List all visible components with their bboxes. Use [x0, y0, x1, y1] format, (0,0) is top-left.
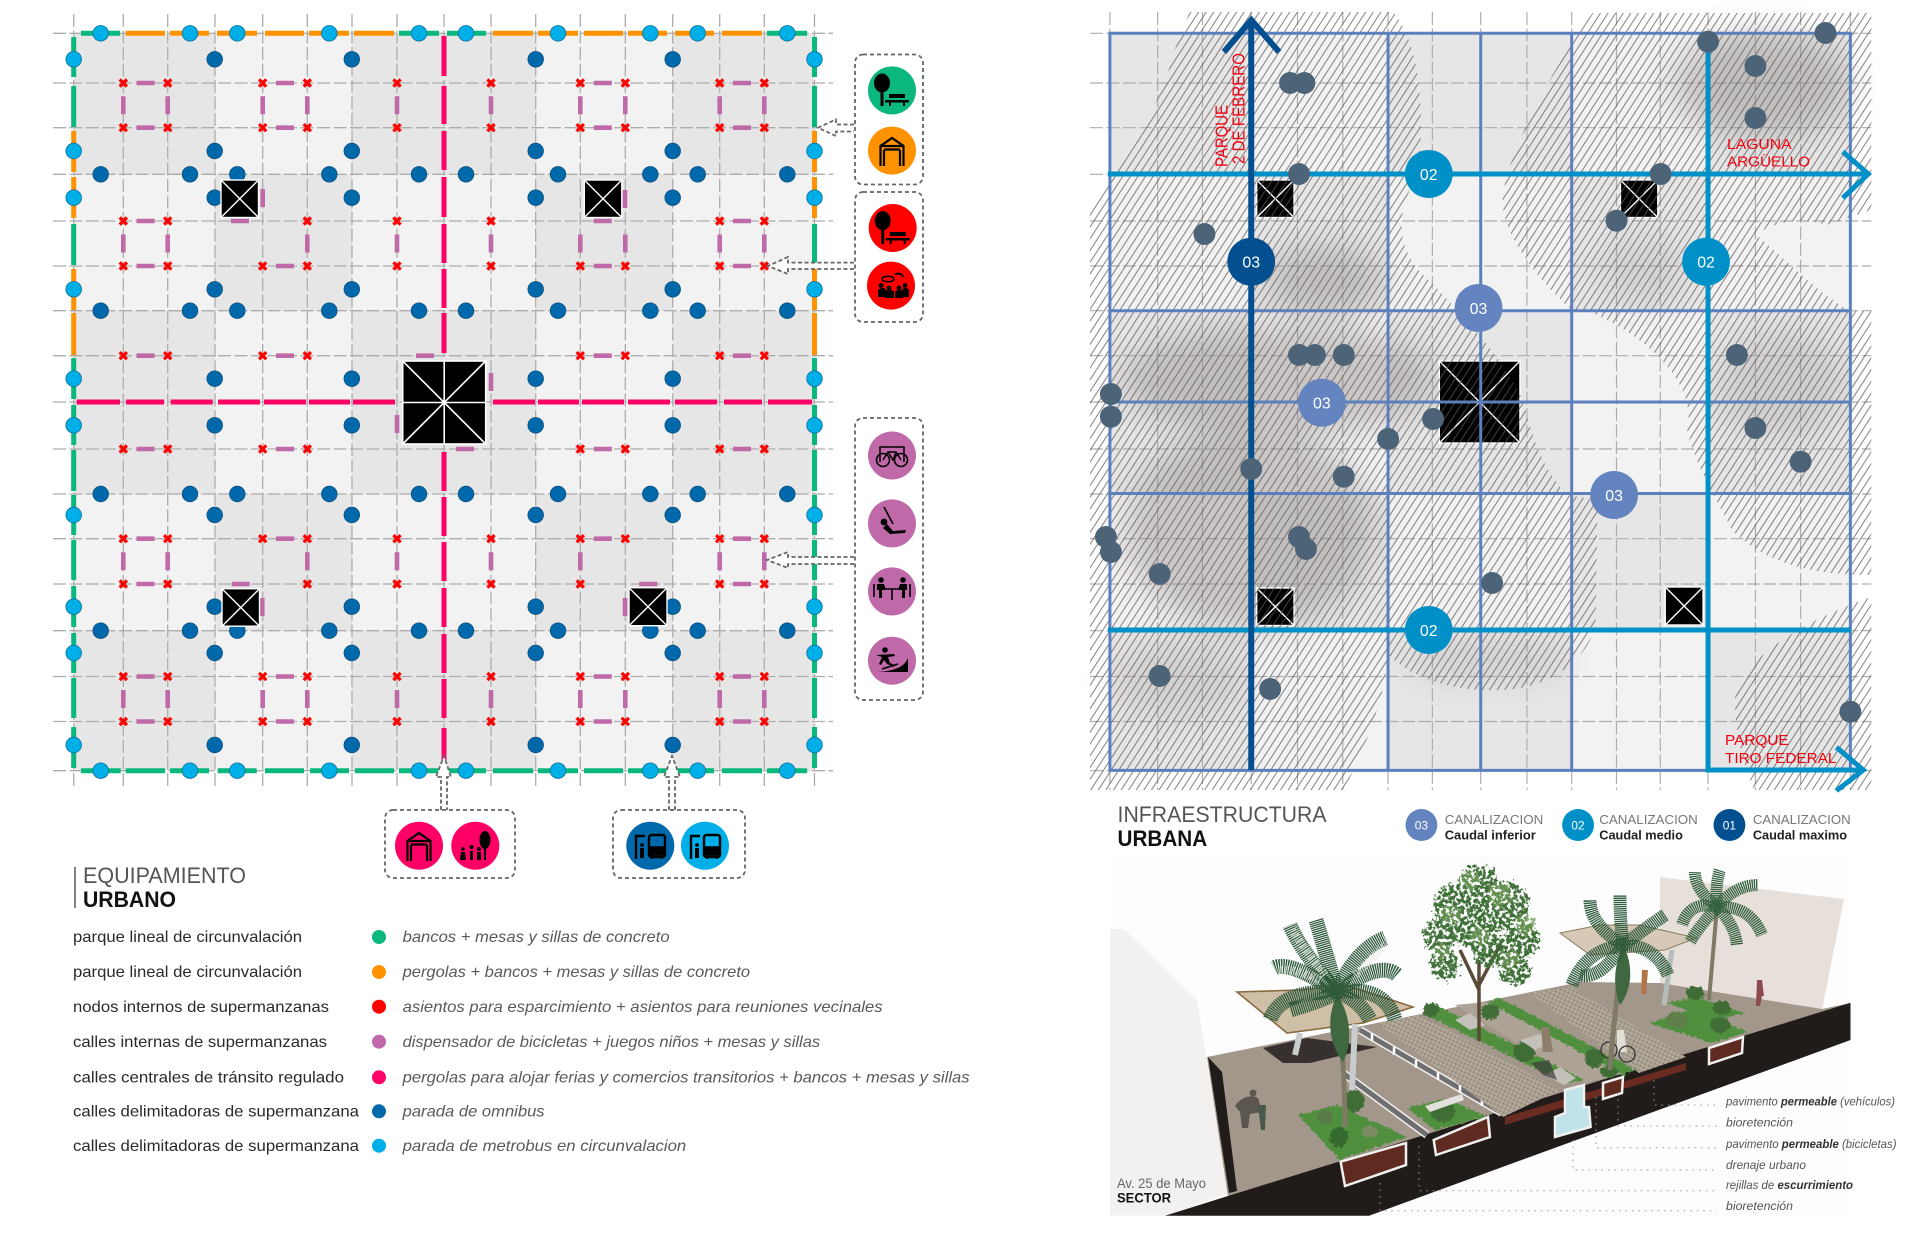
legend: equipamiento: asientos para esparcimiento + asientos para reuniones vecinales	[403, 999, 883, 1016]
arrow: central street box	[436, 756, 451, 810]
label: laguna arguello	[1727, 136, 1810, 171]
icon: family and tree pink	[451, 822, 499, 870]
label: parque 2 de febrero	[1211, 53, 1248, 167]
benches	[1425, 1013, 1576, 1112]
numbered channel nodes	[1227, 150, 1730, 654]
left building	[1110, 929, 1229, 1216]
legend: equipamiento: pergolas para alojar ferias y comercios transitorios + bancos + mesas y sillas	[402, 1070, 970, 1086]
section labels: rejillas de escurrimiento	[1726, 1178, 1853, 1192]
map base checkerboard	[74, 33, 814, 771]
legend: equipamiento: nodos internos de supermanzanas	[73, 999, 329, 1016]
legend: canalizacion: 03	[1415, 818, 1428, 833]
section boxes	[1341, 1037, 1743, 1186]
arrow: icon box 3 to internal street	[767, 552, 854, 568]
icon box: paradas (blue, cyan)	[613, 810, 745, 878]
label: parque tiro federal: PARQUE	[1725, 732, 1789, 749]
runoff points: grey dots	[1095, 22, 1861, 723]
canopy right	[1560, 925, 1696, 1005]
icon: skate ramp	[868, 637, 916, 685]
legend: canalizacion: CANALIZACION	[1753, 812, 1851, 827]
legend: canalizacion: CANALIZACION	[1445, 812, 1543, 827]
section labels: drenaje urbano	[1726, 1158, 1806, 1172]
section labels	[1725, 1095, 1896, 1213]
section labels: bioretención	[1726, 1199, 1793, 1213]
channel: caudal medio lines and arrows	[1108, 42, 1868, 791]
label: laguna arguello: LAGUNA	[1727, 136, 1792, 153]
icon box: parque lineal (green, orange)	[855, 54, 923, 184]
legend: equipamiento: calles delimitadoras de supermanzana	[73, 1104, 359, 1120]
legend: equipamiento: parada de metrobus en circunvalacion	[402, 1138, 686, 1155]
legend: equipamiento: parada de omnibus	[402, 1104, 545, 1120]
right building	[1660, 877, 1844, 1010]
icon box: calles internas (purple)	[855, 418, 923, 700]
soil band	[1505, 1063, 1686, 1125]
shrubs	[1317, 986, 1731, 1147]
map: equipamiento urbano plan	[53, 14, 833, 787]
heading: infraestructura urbana: URBANA	[1118, 826, 1207, 851]
palm centre	[1572, 895, 1668, 1070]
label: parque 2 de febrero: PARQUE	[1211, 105, 1231, 167]
channel: caudal maximo line and arrow	[1224, 20, 1279, 770]
heading: infraestructura urbana: INFRAESTRUCTURA	[1118, 802, 1327, 827]
tree broadleaf	[1423, 865, 1540, 1041]
hatched permeable areas	[1090, 12, 1871, 790]
legend: equipamiento: pergolas + bancos + mesas y sillas de concreto	[402, 964, 750, 981]
cobbled bike strip	[1455, 1002, 1623, 1083]
heading: equipamiento urbano	[75, 863, 246, 912]
legend: canalizacion: CANALIZACION	[1599, 812, 1698, 827]
icon: tree and bench red	[869, 204, 917, 252]
perimeter linear park: orange segments	[74, 33, 814, 355]
planters and medians	[1298, 997, 1748, 1160]
section labels: bioretención	[1726, 1116, 1793, 1130]
icon box: nodos internos (red)	[855, 192, 923, 322]
leader lines	[1380, 1080, 1717, 1211]
street section: av. 25 de mayo render	[1110, 856, 1896, 1216]
numbered channel nodes: 03	[1470, 301, 1488, 318]
black ground section	[1165, 1003, 1850, 1216]
legend: equipamiento: calles internas de supermanzanas	[73, 1034, 327, 1051]
internal nodes: red crosses	[120, 79, 768, 725]
grey smudges: runoff density	[1110, 30, 1851, 720]
heading: equipamiento urbano: EQUIPAMIENTO	[83, 863, 246, 888]
icon: pergola orange	[868, 127, 916, 175]
arrow: icon box 1 to perimeter	[818, 120, 854, 136]
heading: infraestructura urbana	[1118, 802, 1327, 851]
sector label: SECTOR	[1117, 1190, 1171, 1206]
arrow: bus stop box	[664, 756, 680, 810]
canopy shadow	[1263, 1038, 1377, 1063]
legend: canalizacion: Caudal maximo	[1753, 827, 1847, 842]
numbered channel nodes: 02	[1420, 623, 1438, 640]
section labels: pavimento permeable (vehículos)	[1725, 1095, 1895, 1109]
palm left	[1270, 920, 1397, 1127]
icon: table with people	[868, 567, 916, 615]
central black square	[403, 361, 486, 444]
icon: metrobus stop cyan	[681, 822, 729, 870]
legend: equipamiento: parque lineal de circunvalación	[73, 929, 302, 946]
numbered channel nodes: 02	[1697, 254, 1715, 272]
bus stops: blue circles	[93, 52, 795, 753]
icon: pergola pink	[395, 822, 443, 870]
numbered channel nodes: 03	[1242, 254, 1260, 272]
legend: equipamiento: bancos + mesas y sillas de concreto	[403, 929, 670, 946]
pavement	[1207, 982, 1850, 1197]
perimeter linear park: green segments	[74, 33, 814, 771]
legend: equipamiento: calles delimitadoras de supermanzana	[73, 1138, 359, 1155]
legend: canalizacion: 01	[1723, 818, 1736, 833]
numbered channel nodes: 03	[1313, 395, 1331, 413]
icon: tree and bench green	[868, 66, 916, 114]
central regulated streets: pink segments	[77, 36, 812, 768]
label: laguna arguello: ARGÜELLO	[1727, 153, 1810, 171]
icon: bicycle dispenser	[868, 432, 916, 480]
black squares: right map nodes	[1257, 180, 1703, 626]
legend: canalizacion: Caudal medio	[1599, 827, 1683, 842]
section labels: pavimento permeable (bicicletas)	[1725, 1137, 1896, 1151]
right map base checkerboard	[1110, 33, 1850, 771]
legend: equipamiento: parque lineal de circunvalación	[73, 964, 302, 981]
numbered channel nodes: 02	[1420, 167, 1438, 184]
cobbled vehicle strips	[1377, 987, 1686, 1117]
legend: equipamiento: dispensador de bicicletas + juegos niños + mesas y sillas	[403, 1034, 820, 1051]
map: infraestructura urbana plan	[1090, 12, 1871, 791]
canopy left	[1237, 985, 1413, 1090]
icon: child on swing	[868, 499, 916, 547]
internal streets: purple dashes	[123, 83, 764, 722]
metrobus stops: cyan circles	[66, 26, 822, 778]
numbered channel nodes: 03	[1605, 488, 1623, 505]
arrow: icon box 2 to node	[768, 257, 854, 274]
sector label: Av. 25 de Mayo	[1117, 1175, 1206, 1191]
icon: bus stop blue	[626, 822, 674, 870]
legend: equipamiento	[73, 929, 970, 1155]
people	[1235, 970, 1764, 1130]
drainage network: blue lines	[1110, 33, 1850, 770]
label: parque tiro federal	[1725, 732, 1836, 767]
heading: equipamiento urbano: URBANO	[83, 887, 176, 912]
label: parque tiro federal: TIRO FEDERAL	[1725, 750, 1836, 767]
channels	[1343, 1030, 1502, 1135]
icon: neighbourhood meeting red	[867, 262, 915, 310]
black squares: supermanzana nodes	[221, 180, 667, 626]
icon box: calles centrales (pink)	[385, 810, 515, 878]
legend: canalizacion: 02	[1571, 818, 1585, 833]
palm right	[1682, 870, 1762, 1000]
label: parque 2 de febrero: 2 DE FEBRERO	[1228, 53, 1248, 164]
legend: canalizacion: Caudal inferior	[1445, 827, 1536, 842]
sector label	[1117, 1175, 1206, 1206]
legend: canalizacion	[1405, 809, 1851, 842]
legend: equipamiento: calles centrales de tránsito regulado	[73, 1070, 344, 1086]
